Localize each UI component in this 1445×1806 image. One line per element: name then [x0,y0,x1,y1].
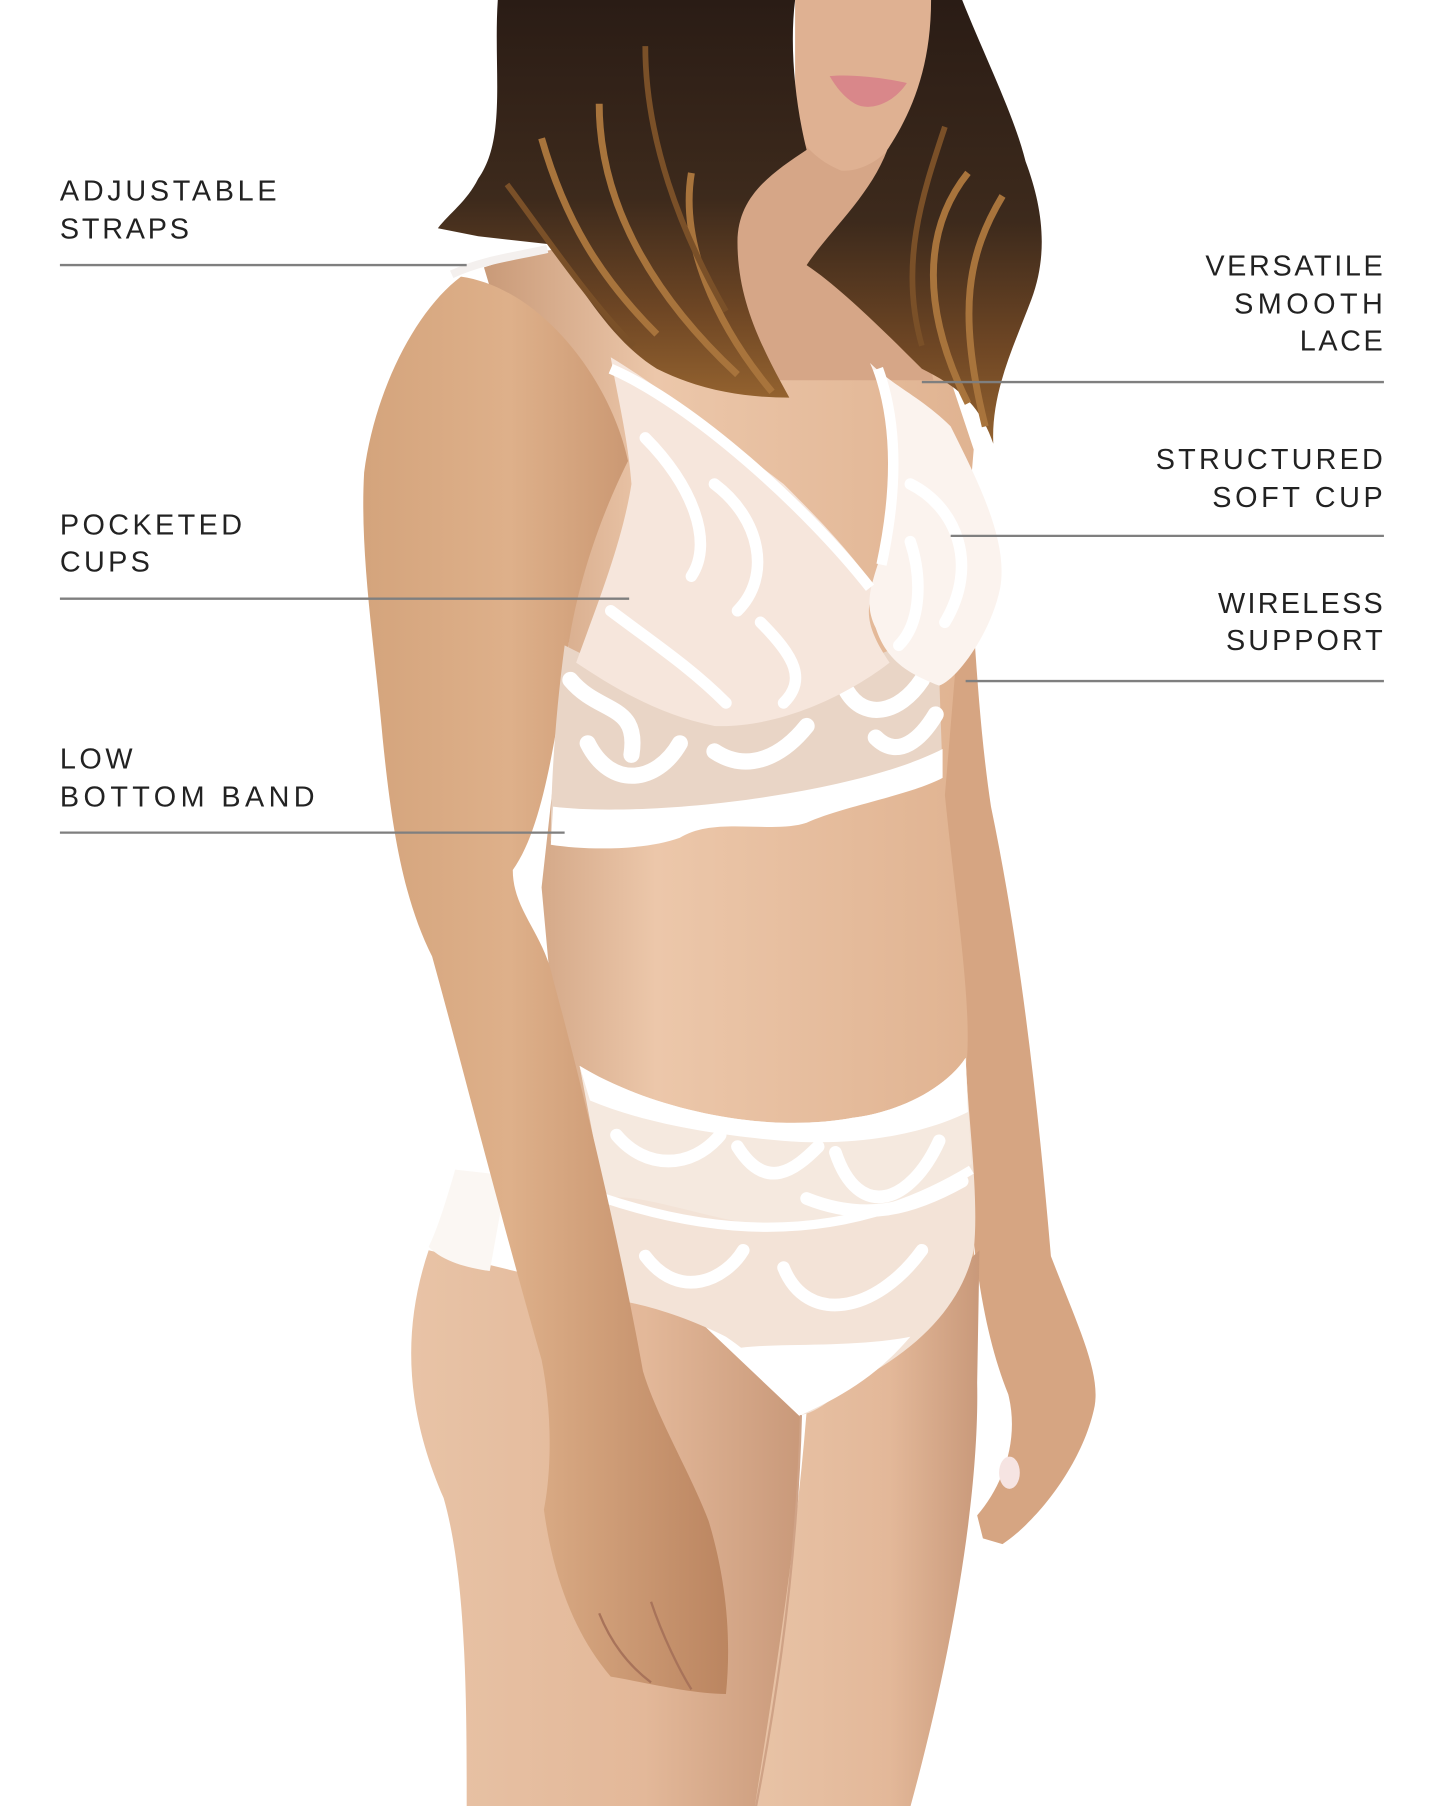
near arm and hand [363,277,728,1694]
label: adjustable straps: STRAPS [60,214,189,246]
label: low bottom band [60,744,565,833]
fingernail [999,1457,1020,1489]
far arm and hand [939,438,1096,1544]
bra cups [576,357,1002,726]
label: versatile smooth lace [922,250,1384,382]
label: versatile smooth lace: SMOOTH [1234,288,1383,320]
label: wireless support [966,588,1384,681]
fingers [599,1602,691,1689]
leg divide [756,1415,801,1806]
underwear [429,1058,975,1415]
label: wireless support: SUPPORT [1226,625,1383,657]
label: low bottom band: LOW [60,744,133,776]
legs [411,1250,801,1806]
hair [438,0,1042,444]
bra strap [452,249,547,274]
label: adjustable straps [60,176,467,265]
label: low bottom band: BOTTOM BAND [60,782,315,814]
figure: model wearing the lace set [363,0,1096,1806]
label: versatile smooth lace: VERSATILE [1205,250,1383,282]
label: structured soft cup: STRUCTURED [1156,444,1383,476]
label: pocketed cups: CUPS [60,547,150,579]
neck [726,104,933,380]
label: structured soft cup: SOFT CUP [1212,482,1383,514]
face [795,0,939,171]
label: structured soft cup [951,444,1384,536]
bra band [551,645,943,848]
label: versatile smooth lace: LACE [1300,325,1383,357]
label: wireless support: WIRELESS [1218,588,1383,620]
lips [830,75,907,107]
torso [484,248,975,1268]
label: pocketed cups: POCKETED [60,510,242,542]
label: adjustable straps: ADJUSTABLE [60,176,277,208]
label: pocketed cups [60,510,629,599]
